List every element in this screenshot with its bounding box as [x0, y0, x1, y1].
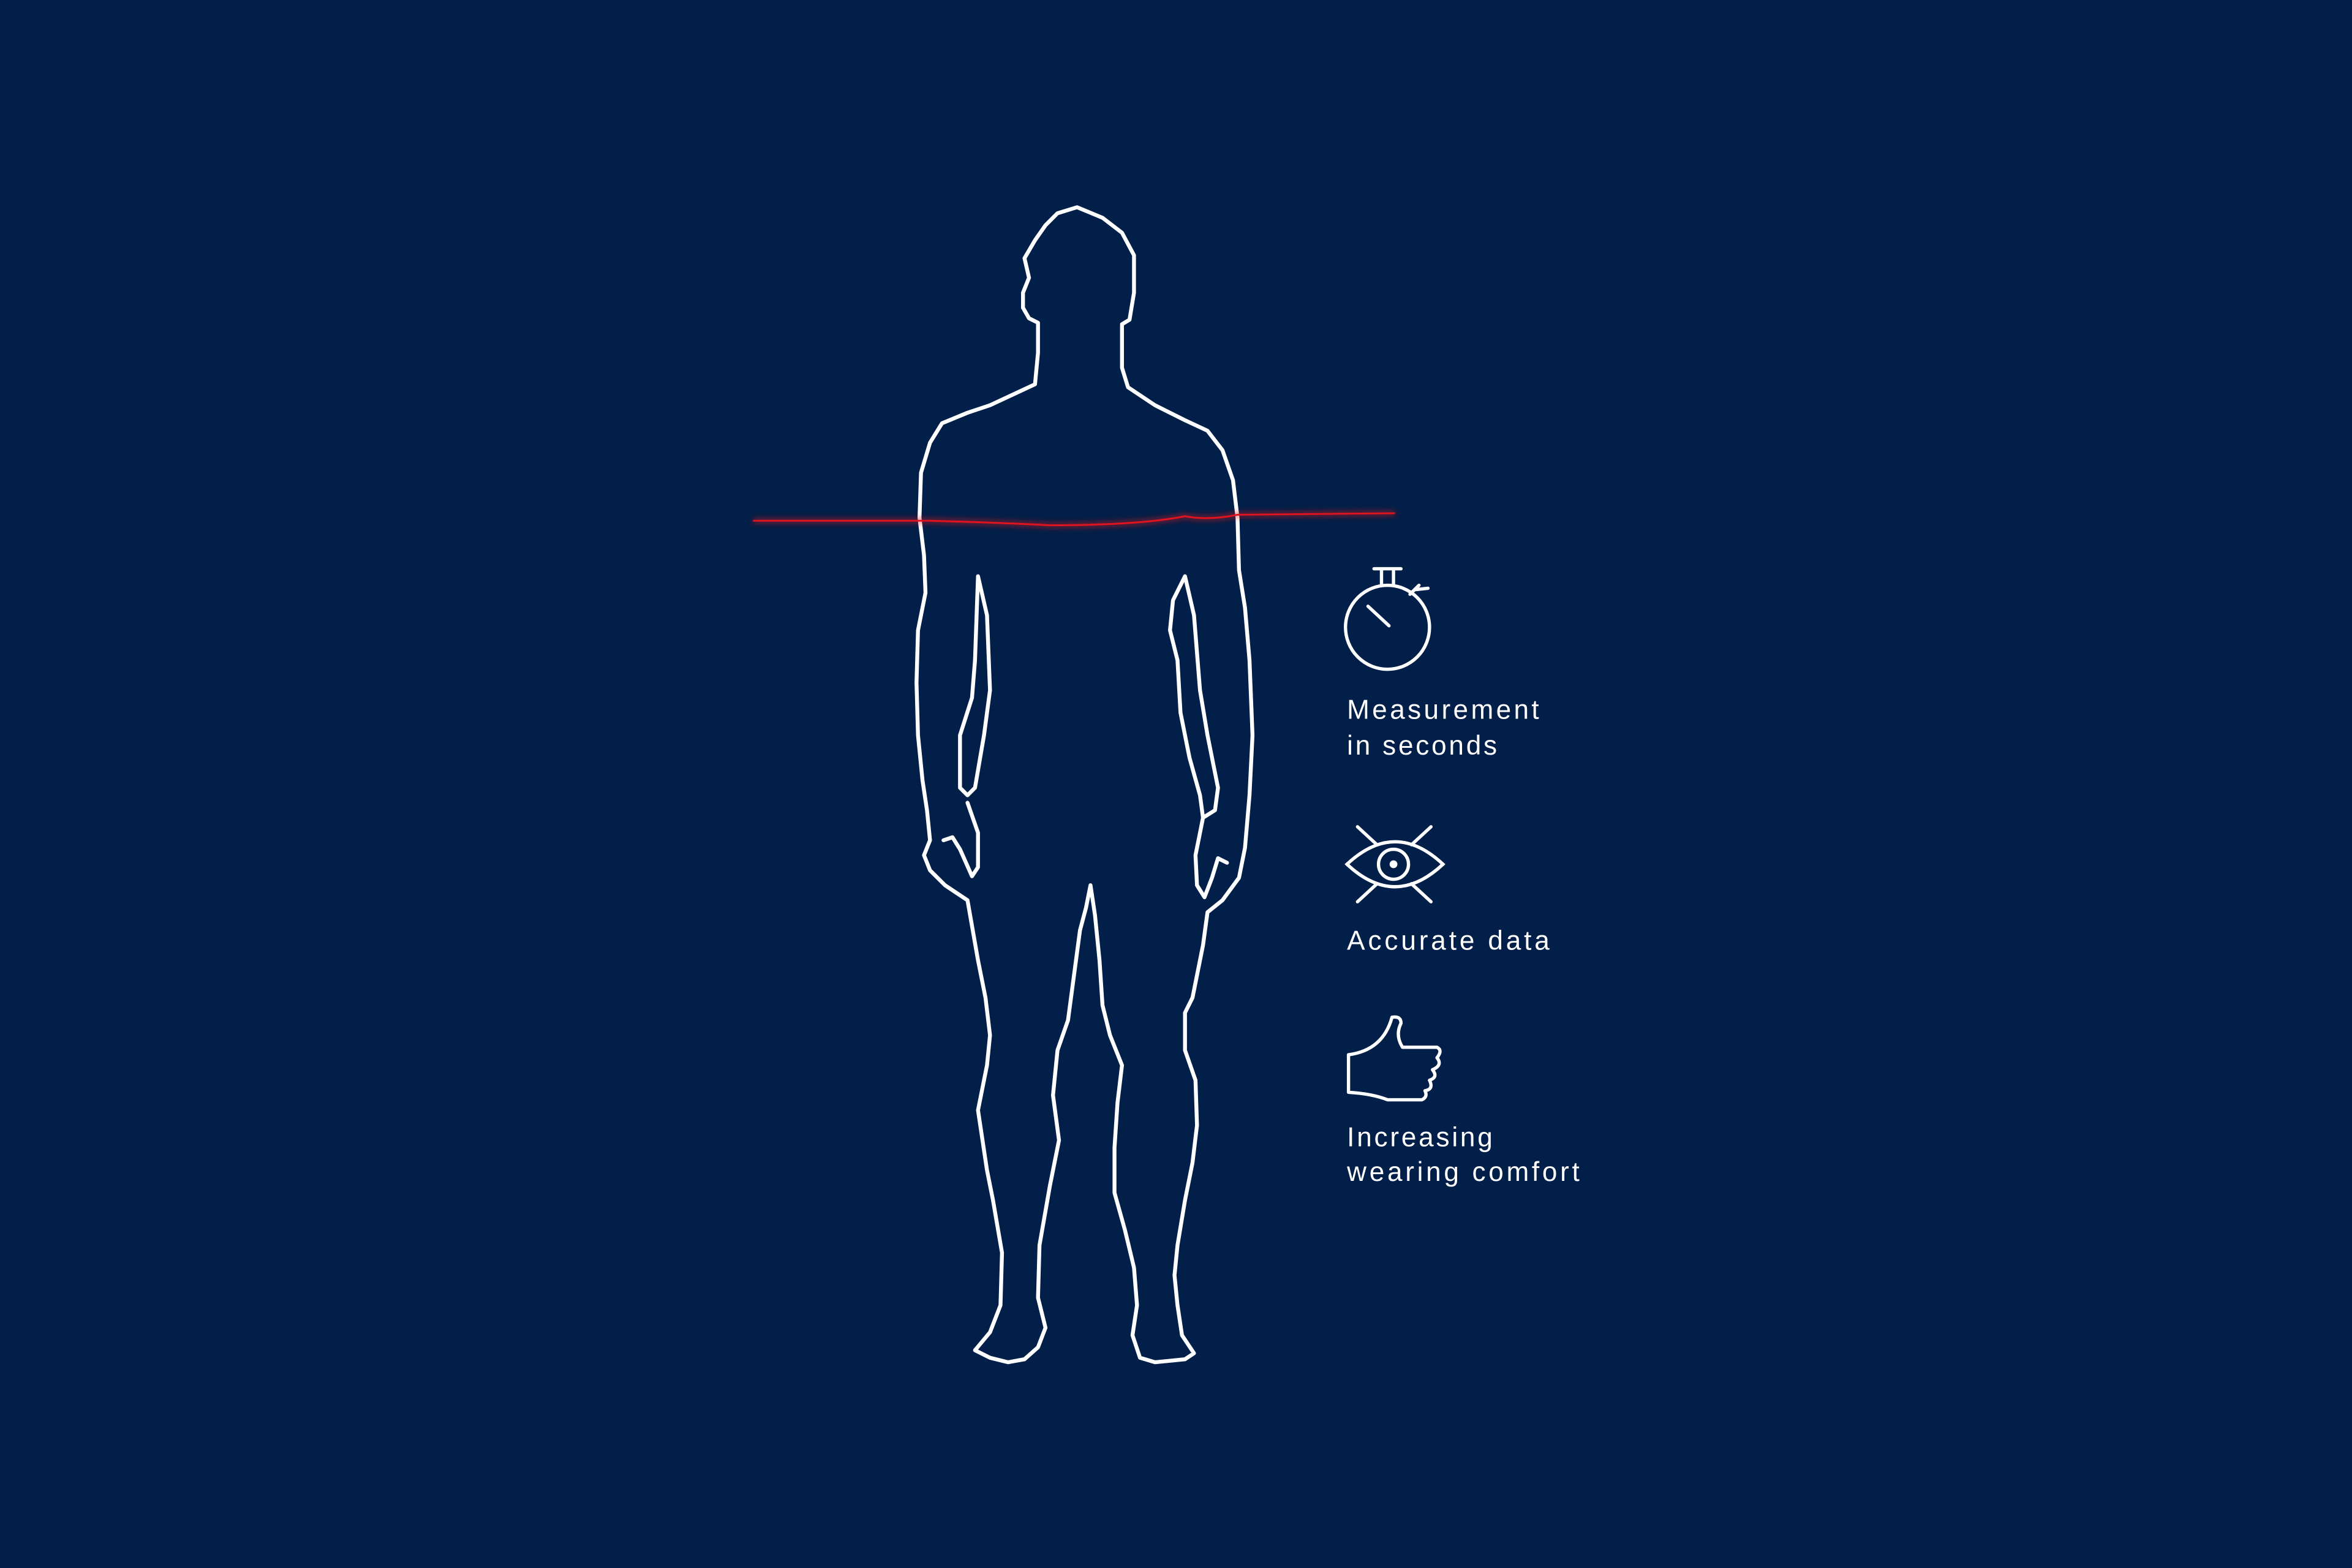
- icon: stopwatch: [1346, 569, 1430, 669]
- icon: eye: [1347, 827, 1443, 902]
- text: measurement in seconds: [1347, 695, 1539, 761]
- icon: thumbs up: [1349, 1017, 1440, 1100]
- text: increasing wearing comfort: [1346, 1122, 1580, 1187]
- text: accurate data: Accurate data: [1347, 926, 1550, 956]
- text: measurement in seconds: Measurement: [1347, 695, 1539, 725]
- text: increasing wearing comfort: wearing comfort: [1346, 1157, 1580, 1187]
- text: measurement in seconds: in seconds: [1347, 731, 1497, 761]
- text: increasing wearing comfort: Increasing: [1347, 1122, 1493, 1152]
- red scan line: [753, 513, 1395, 526]
- human body outline: [916, 207, 1253, 1362]
